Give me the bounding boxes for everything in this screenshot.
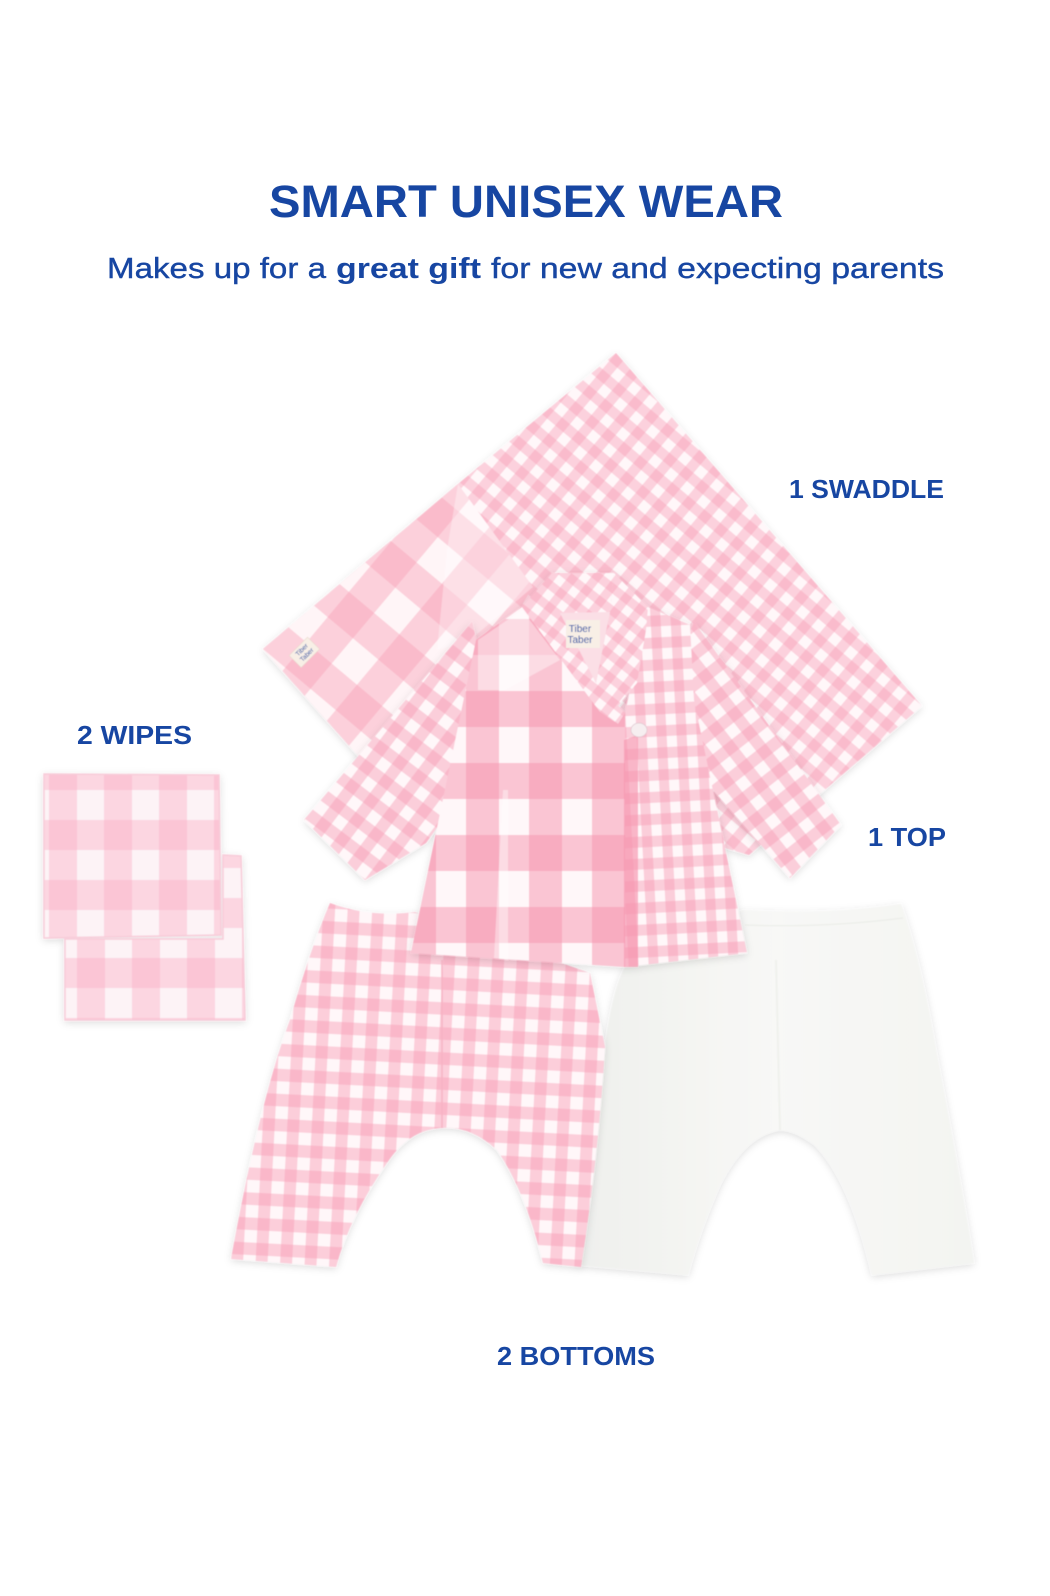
bottom wipe: [65, 855, 245, 1020]
neck label: Tiber: [569, 624, 592, 635]
top: [304, 573, 841, 967]
white pants: [577, 904, 974, 1275]
right collar: [596, 573, 648, 707]
subtitle: great gift: [336, 253, 481, 285]
pleat left: [494, 790, 508, 960]
label: 2 bottoms: 2 BOTTOMS: [497, 1341, 655, 1371]
left collar: [522, 573, 625, 724]
label: 1 top: 1 TOP: [868, 822, 946, 852]
subtitle: for new and expecting parents: [491, 253, 944, 285]
swaddle label: Taber: [299, 646, 316, 663]
shoulder highlight: [478, 610, 560, 690]
label: 2 wipes: 2 WIPES: [77, 720, 192, 750]
subtitle: [107, 253, 944, 285]
title: SMART UNISEX WEAR: [269, 176, 783, 227]
pink pants: [231, 903, 605, 1267]
swaddle label: [289, 637, 320, 668]
swaddle label: Tiber: [295, 642, 310, 658]
neck interior: [552, 573, 614, 683]
button: [631, 723, 647, 737]
right panel: [625, 607, 747, 967]
label: 1 swaddle: 1 SWADDLE: [789, 474, 944, 504]
back collar: [552, 573, 614, 613]
swaddle large-check fold: [263, 484, 533, 759]
neck label: Taber: [567, 635, 593, 646]
right sleeve: [670, 622, 841, 878]
wipes: [44, 774, 245, 1020]
body: [411, 607, 625, 967]
left sleeve: [304, 622, 500, 880]
subtitle: Makes up for a: [107, 253, 327, 285]
swaddle: [263, 353, 922, 855]
neck label: [566, 620, 600, 648]
top wipe: [44, 774, 221, 938]
